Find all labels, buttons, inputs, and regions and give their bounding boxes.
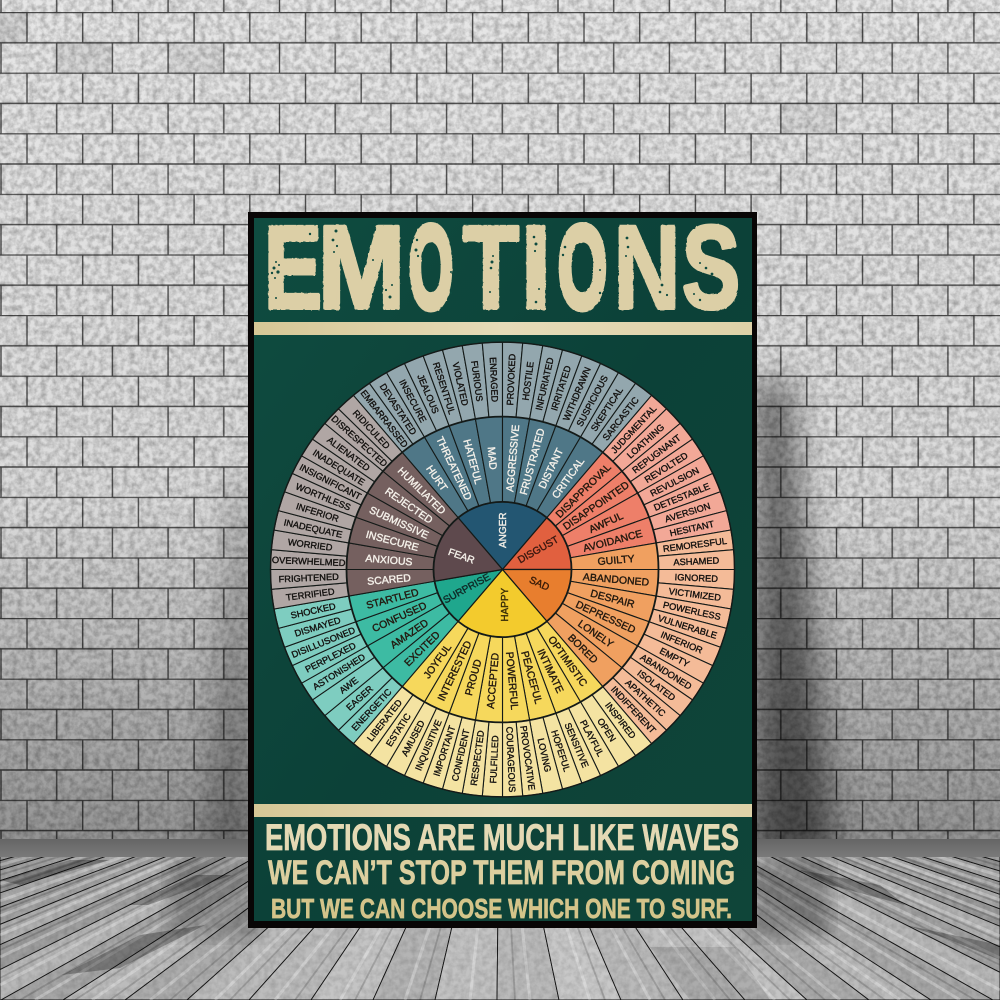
poster frame [248,212,757,928]
outer ring: anger: WITHDRAWN [561,366,593,422]
outer ring: anger: PROVOKED [505,353,517,406]
outer ring: sad: INFERIOR [659,630,704,656]
outer ring: anger: INFURIATED [534,356,556,411]
title: EMOTIONS: O [558,202,607,334]
outer ring: happy: LOVING [536,737,553,773]
tagline line 1: EMOTIONS ARE MUCH LIKE WAVES [265,817,739,858]
tagline line 3: BUT WE CAN CHOOSE WHICH ONE TO SURF. [271,893,732,924]
middle ring: disgust: AVOIDANCE [582,529,644,555]
outer ring: happy: LIBERATED [365,697,404,743]
outer ring: happy: INQUISITIVE [413,718,444,772]
inner wheel: six core emotions [434,502,572,637]
core labels: FEAR [446,547,476,566]
outer ring: disgust: HESITANT [669,519,715,538]
wood grain streaks [0,857,1000,1000]
outer ring: fear: WORRIED [287,537,333,553]
middle ring: disgust [541,452,657,565]
outer ring: sad: POWERLESS [662,600,722,622]
middle ring: fear: SUBMISSIVE [367,505,430,542]
outer ring: disgust: DETESTABLE [652,481,711,513]
core: anger [458,502,547,570]
outer ring: sad: INDIFFERENT [609,684,658,736]
outer ring: happy: COURAGEOUS [504,726,517,792]
middle ring: disgust: DISAPPOINTED [561,480,632,533]
outer ring: fear: OVERWHELMED [272,555,346,568]
middle ring: surprise: EXCITED [403,630,443,669]
core labels: DISGUST [516,535,561,566]
outer ring: sad: EMPTY [658,646,691,669]
outer ring: sad: IGNORED [674,572,719,584]
outer ring: fear: INFERIOR [295,501,340,524]
title: EMOTIONS: I [521,202,551,334]
outer ring: happy: HOPEFUL [549,729,572,773]
title speckles [271,230,718,303]
outer ring: happy: PROVOCATIVE [518,725,537,791]
outer ring: happy: OPEN [595,716,618,744]
outer ring: sad: VULNERABLE [657,613,718,641]
middle ring: happy: ACCEPTED [486,653,502,709]
outer ring: surprise: DISILLUSONED [290,625,357,660]
outer ring: surprise: AWE [337,675,360,696]
outer ring: surprise: DISMAYED [293,615,342,639]
title: EMOTIONS: E [264,202,322,334]
outer ring: fear: WORTHLESS [294,481,352,513]
outer ring: sad: ABANDONED [638,652,694,692]
middle ring: fear: SCARED [367,573,411,588]
middle ring: anger: DISTANT [537,446,566,491]
outer ring: anger [353,342,652,454]
middle ring: happy: JOYFUL [422,642,454,681]
poster [248,202,757,928]
middle ring: fear: REJECTED [383,486,434,526]
outer ring: surprise: SHOCKED [290,601,337,621]
outer ring: anger: SUSPICIOUS [575,374,610,428]
outer ring: anger: HOSTILE [520,361,536,401]
middle ring: surprise [348,574,464,687]
outer ring: fear: INADEQUATE [283,517,343,540]
outer ring: anger: VIOLATED [450,361,470,407]
middle ring: happy: OPTIMISTIC [545,635,589,689]
middle ring: anger: HATEFUL [460,438,483,486]
outer ring: disgust: REVOLTED [643,450,690,485]
title: EMOTIONS: T [463,202,519,334]
outer ring: surprise [274,593,405,744]
outer ring: happy: CONFIDENT [450,728,472,782]
outer ring: sad: APATHETIC [623,678,668,719]
title: EMOTIONS: M [318,202,405,334]
middle ring: fear: INSECURE [364,530,420,554]
core: disgust [502,518,572,570]
bottom cream band [254,804,752,817]
outer ring: happy [353,685,652,797]
core labels: HAPPY [500,588,511,622]
core labels: SURPRISE [442,572,493,606]
outer ring: disgust: REVULSION [649,465,701,498]
core: happy [458,570,547,637]
core: fear [434,518,502,581]
middle ring: sad: ABANDONED [582,572,650,589]
darker floor boards [0,860,1000,1000]
middle ring: surprise: AMAZED [389,618,431,651]
middle ring: fear: HUMILIATED [395,466,447,517]
outer ring: anger: JEALOUS [415,373,441,415]
core labels: ANGER [498,513,509,548]
middle ring: disgust: AWFUL [588,511,625,536]
outer ring: disgust: JUDGMENTAL [609,404,659,455]
middle ring: sad [541,543,659,687]
middle ring: anger: MAD [485,446,498,470]
middle ring: anger: AGGRESSIVE [505,424,522,492]
core: surprise [435,570,502,621]
middle ring: sad: BORED [565,633,599,666]
middle ring: happy: POWERFUL [503,651,519,711]
middle ring: anger: FRUSTRATED [519,428,548,496]
tagline [265,817,739,924]
outer ring: fear: DISRESPECTED [329,414,390,469]
middle ring: surprise: STARTLED [365,588,420,612]
outer ring: anger: SKEPTICAL [589,386,625,433]
tagline line 2: WE CAN’T STOP THEM FROM COMING [268,854,735,892]
outer ring: happy: RESPECTED [469,729,486,786]
outer ring: disgust: AVERSION [664,501,712,524]
outer ring: happy: IMPORTANT [432,724,457,778]
outer ring: disgust [600,395,731,546]
outer ring: anger: SARCASTIC [601,395,641,442]
outer ring: surprise: ASTONISHED [311,652,367,692]
outer ring: fear: INSIGNIFICANT [298,462,363,502]
outer ring: sad: VICTIMIZED [668,586,722,603]
title: EMOTIONS: N [614,202,680,334]
middle ring: anger [402,416,603,522]
outer ring: anger: RESENTFUL [431,361,457,416]
outer ring: happy: FULFILLED [488,735,500,784]
outer ring: happy: PLAYFUL [578,718,606,758]
outer ring: sad: ISOLATED [635,668,678,703]
outer ring: fear: RIDICULED [351,408,392,451]
core labels: SAD [527,575,551,593]
title: EMOTIONS: O [409,202,453,334]
outer ring: anger: FURIOUS [469,360,485,402]
middle ring: happy: INTIMATE [534,648,565,695]
outer ring: anger: EMBARRASSED [359,388,410,450]
outer ring: happy: ESTATIC [384,711,413,748]
wooden floor [0,857,1000,1000]
outer ring: surprise: EAGER [344,683,375,713]
outer ring: anger: IRRITATED [549,364,573,412]
outer ring: fear: INADEQUATE [311,448,367,487]
middle ring: happy [402,617,603,723]
outer ring: fear: TERRIFIED [285,586,335,603]
outer ring: anger: ENRAGED [488,357,500,403]
outer ring: happy: INSPIRED [603,700,638,741]
outer ring: disgust: LOATHING [625,422,666,460]
middle ring: sad: DEPRESSED [574,600,637,636]
ring outlines [270,342,734,797]
outer ring: fear [270,395,405,609]
middle ring: surprise: CONFUSED [371,601,429,635]
middle ring: anger: THREATENED [433,435,473,502]
middle ring: happy: INTERESTED [436,640,475,703]
outer ring: sad: REMORESFUL [662,536,727,554]
baseboard [0,839,1000,857]
poster shadow on wall [205,380,835,860]
middle ring: disgust: DISAPPROVAL [554,462,614,521]
outer ring: anger: INSECURE [397,378,428,424]
middle ring: sad: GUILTY [597,554,635,568]
outer ring: sad: ASHAMED [673,556,720,567]
middle ring: happy: PEACEFUL [518,650,543,706]
outer ring: disgust: REPUGNANT [630,432,683,475]
middle ring: anger: CRITICAL [551,456,587,501]
title: EMOTIONS [264,202,740,334]
core labels [442,513,561,622]
core: sad [502,570,572,621]
middle ring: anger: HURT [423,464,449,494]
middle ring: happy: PROUD [464,658,484,697]
outer ring: surprise: ENERGETIC [350,687,394,733]
middle ring: sad: LONELY [575,619,615,651]
outer ring: happy: AMUSED [400,718,427,758]
outer ring: anger: DEVASTATED [378,382,419,437]
title: EMOTIONS: S [682,202,740,334]
outer ring: surprise: PERPLEXED [304,640,358,675]
outer ring: fear: FRIGHTENED [278,572,339,584]
middle ring: sad: DESPAIR [589,589,636,611]
middle ring: fear [346,452,464,596]
emotions wheel chart [270,342,735,797]
outer ring: fear: ALIENATED [325,435,372,473]
outer ring: sad [600,530,735,744]
top cream band [254,322,752,335]
middle ring: fear: ANXIOUS [365,554,413,568]
outer ring: happy: SENSITIVE [563,721,590,769]
poster green background [254,218,752,921]
